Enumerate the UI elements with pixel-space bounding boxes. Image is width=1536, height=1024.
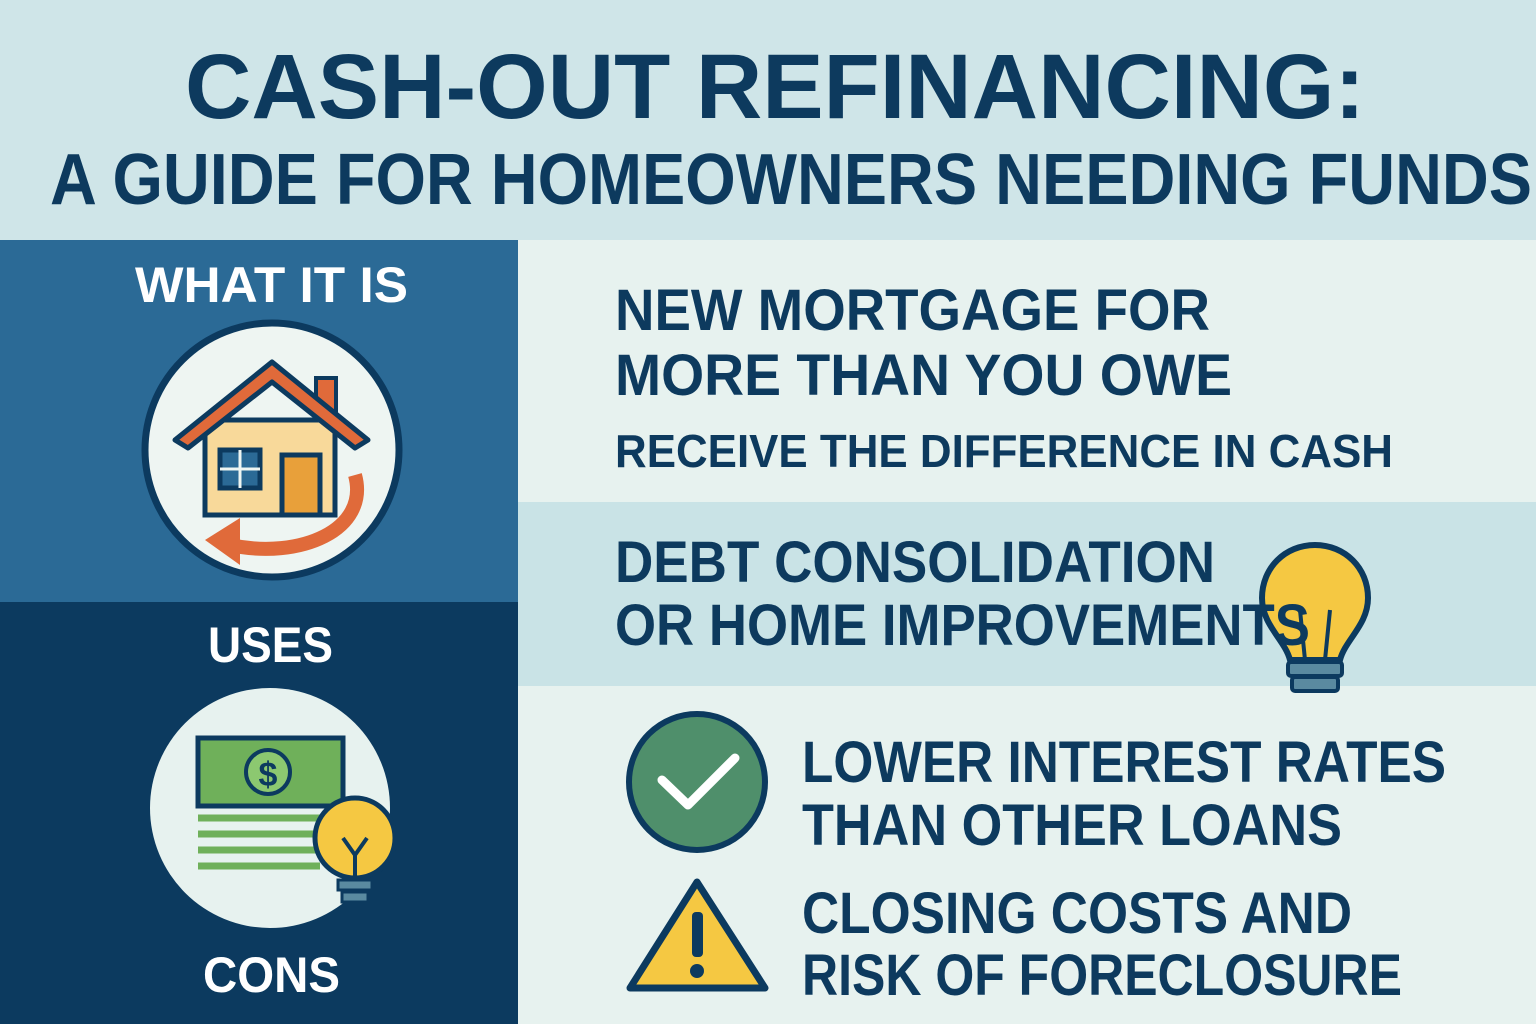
- icon: lightbulb: [1262, 545, 1368, 691]
- text: con: RISK OF FORECLOSURE: [802, 943, 1402, 1008]
- text: uses: [615, 530, 1310, 658]
- panel: right definition: [518, 240, 1536, 502]
- heading: cons: CONS: [203, 947, 340, 1003]
- text: definition: MORE THAN YOU OWE: [615, 343, 1232, 408]
- icon: house with arrow: [145, 323, 399, 577]
- panel: right pros cons: [518, 686, 1536, 1024]
- text: definition: NEW MORTGAGE FOR: [615, 278, 1210, 343]
- icon: money with bulb: [150, 688, 395, 928]
- icon: warning triangle: [630, 882, 765, 988]
- title: [50, 36, 1532, 220]
- text: uses: OR HOME IMPROVEMENTS: [615, 593, 1310, 658]
- text: pro: [802, 730, 1446, 858]
- heading: what it is: WHAT IT IS: [135, 257, 408, 313]
- header band: [0, 0, 1536, 240]
- text: pro: THAN OTHER LOANS: [802, 793, 1342, 858]
- panel: left what it is: [0, 240, 518, 602]
- title: CASH-OUT REFINANCING:: [185, 36, 1365, 138]
- icon: check circle: [629, 714, 765, 850]
- text: definition: RECEIVE THE DIFFERENCE IN CASH: [615, 425, 1393, 477]
- panel: left uses and cons: [0, 602, 518, 1024]
- text: definition: [615, 278, 1393, 477]
- heading: uses: USES: [208, 617, 333, 673]
- text: con: [802, 881, 1402, 1008]
- text: con: CLOSING COSTS AND: [802, 881, 1352, 946]
- panel: right uses: [518, 502, 1536, 686]
- text: pro: LOWER INTEREST RATES: [802, 730, 1446, 795]
- text: uses: DEBT CONSOLIDATION: [615, 530, 1215, 595]
- icon: money with bulb: $: [259, 756, 278, 794]
